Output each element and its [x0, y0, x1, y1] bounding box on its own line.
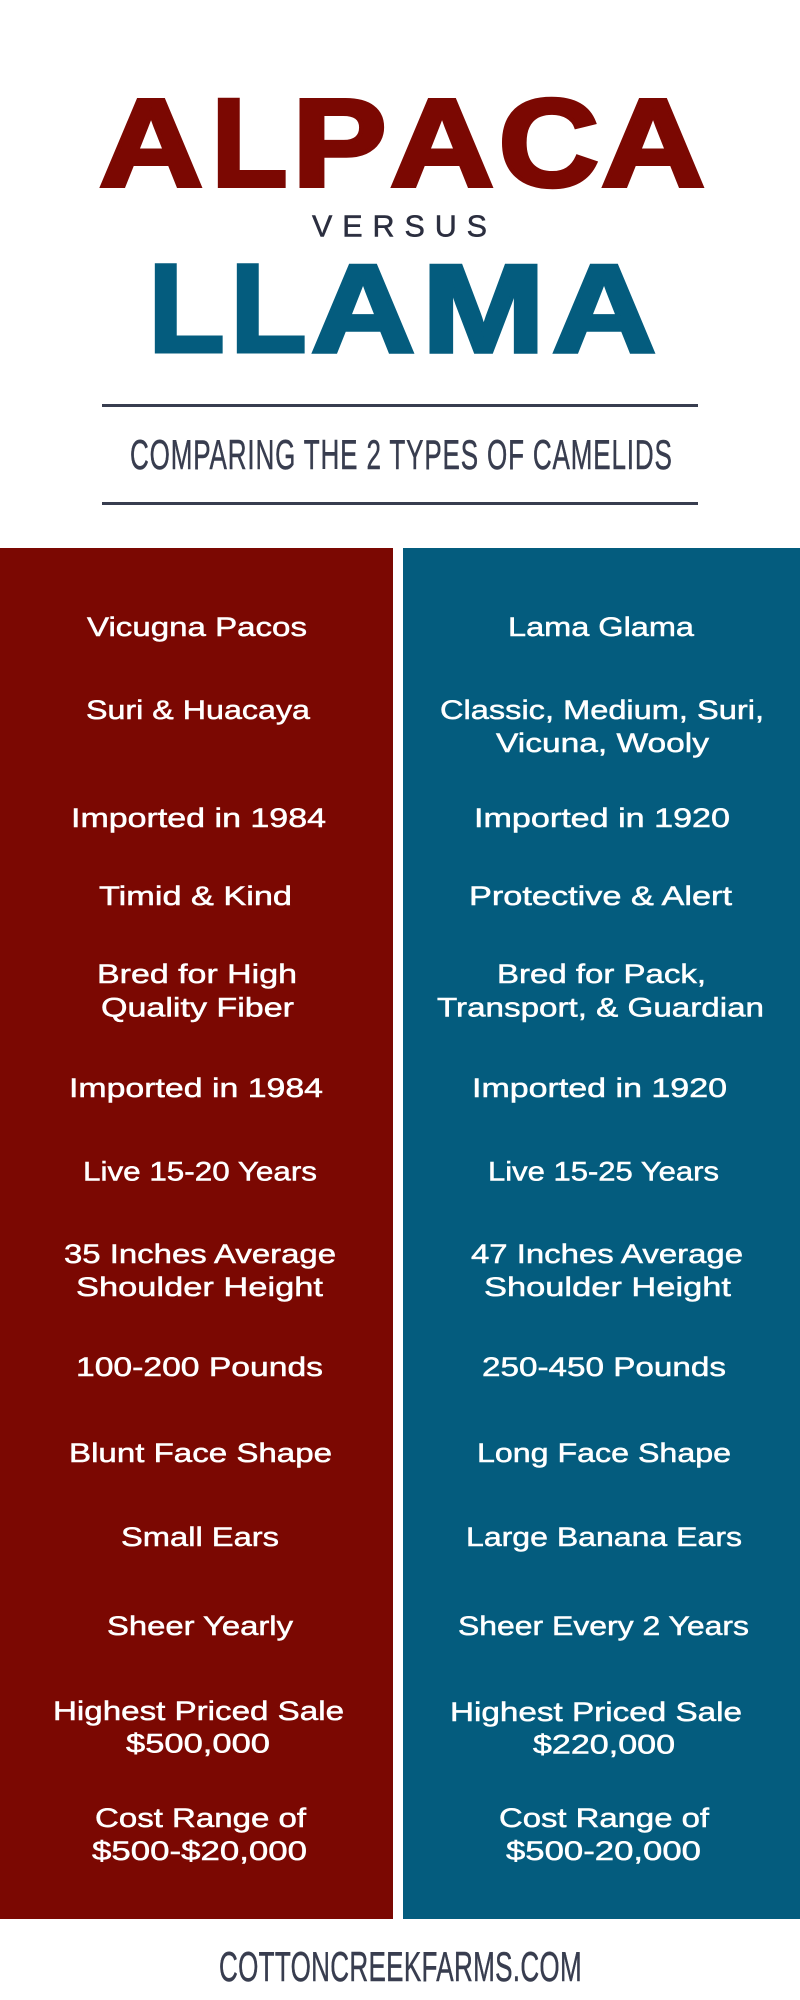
panel: alpaca facts: 100-200 Pounds	[76, 1352, 323, 1382]
panel: alpaca facts: Suri & Huacaya	[86, 695, 310, 725]
panel: llama facts: 47 Inches Average	[471, 1239, 743, 1269]
panel: alpaca facts: Imported in 1984	[69, 1073, 323, 1103]
subtitle block with rules	[102, 404, 698, 505]
panel: alpaca facts: $500-$20,000	[92, 1836, 307, 1866]
panel: llama facts: Sheer Every 2 Years	[458, 1611, 749, 1641]
panel: alpaca facts: 35 Inches Average	[64, 1239, 336, 1269]
panel: llama facts: Transport, & Guardian	[437, 993, 764, 1023]
panel: alpaca facts: $500,000	[126, 1729, 270, 1759]
subtitle block with rules: COMPARING THE 2 TYPES OF CAMELIDS	[130, 432, 672, 479]
panel: alpaca facts: Blunt Face Shape	[69, 1438, 332, 1468]
title: alpaca	[99, 74, 705, 213]
panel: llama facts: Shoulder Height	[484, 1272, 732, 1302]
panel: llama facts: Bred for Pack,	[497, 959, 706, 989]
panel: llama facts: Cost Range of	[499, 1803, 710, 1833]
title: alpaca: L	[212, 74, 288, 213]
panel: llama facts: Long Face Shape	[477, 1438, 731, 1468]
panel: alpaca facts: Shoulder Height	[76, 1272, 324, 1302]
title: alpaca: A	[390, 74, 494, 213]
panel: llama facts: Large Banana Ears	[466, 1522, 742, 1552]
panel: alpaca facts: Imported in 1984	[71, 803, 326, 833]
panel: alpaca facts: Cost Range of	[95, 1803, 307, 1833]
title: llama: M	[422, 240, 545, 379]
panel: llama facts: $500-20,000	[506, 1836, 701, 1866]
title: llama: L	[230, 240, 306, 379]
panel: llama facts: 250-450 Pounds	[482, 1352, 726, 1382]
title: alpaca: P	[292, 74, 387, 213]
panel: alpaca facts: Timid & Kind	[99, 881, 292, 911]
panel: llama facts: Protective & Alert	[469, 881, 733, 911]
panel: llama facts: Live 15-25 Years	[488, 1157, 719, 1187]
panel: alpaca facts: Live 15-20 Years	[83, 1157, 317, 1187]
panel: alpaca facts: Small Ears	[121, 1522, 279, 1552]
panel: llama facts	[403, 548, 800, 1919]
panel: llama facts: Vicuna, Wooly	[496, 728, 710, 758]
panel: alpaca facts: Highest Priced Sale	[53, 1696, 344, 1726]
panel: llama facts: $220,000	[533, 1730, 675, 1760]
title: llama: A	[311, 240, 415, 379]
panel: llama facts: Classic, Medium, Suri,	[440, 695, 764, 725]
title: alpaca: C	[498, 74, 599, 213]
panel: llama facts: Imported in 1920	[474, 803, 730, 833]
panel: llama facts: Lama Glama	[508, 612, 694, 642]
panel: alpaca facts: Quality Fiber	[101, 993, 294, 1023]
title: llama	[148, 240, 656, 379]
title: alpaca: A	[601, 74, 705, 213]
panel: alpaca facts: Vicugna Pacos	[87, 612, 307, 642]
title: llama: A	[552, 240, 656, 379]
title: llama: L	[148, 240, 224, 379]
footer: website: COTTONCREEKFARMS.COM	[219, 1944, 582, 1991]
panel: alpaca facts	[0, 548, 393, 1919]
panel: llama facts: Highest Priced Sale	[450, 1697, 742, 1727]
title: alpaca: A	[99, 74, 203, 213]
panel: alpaca facts: Sheer Yearly	[107, 1611, 294, 1641]
heading: versus: VERSUS	[312, 210, 487, 244]
panel: alpaca facts: Bred for High	[97, 959, 297, 989]
panel: llama facts: Imported in 1920	[472, 1073, 727, 1103]
